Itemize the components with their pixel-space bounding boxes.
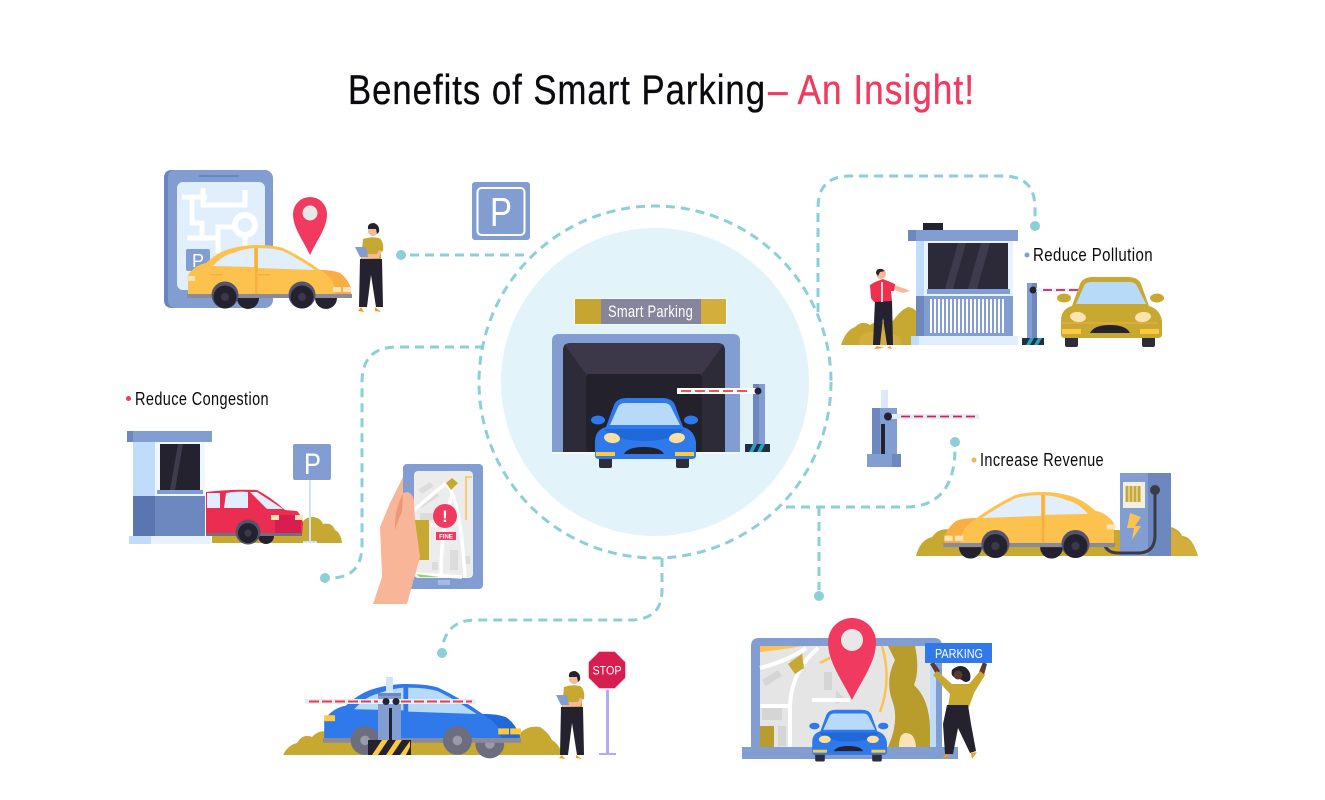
barrier xyxy=(1022,283,1107,345)
central light circle xyxy=(501,228,809,536)
connector: bottom to blue car xyxy=(437,558,662,658)
phone: FINE xyxy=(439,534,453,540)
banner: smart parking: Smart Parking xyxy=(608,302,693,321)
label: increase revenue: Increase Revenue xyxy=(980,449,1104,470)
bush xyxy=(916,527,1198,556)
illustration: standalone barrier xyxy=(867,390,979,467)
phone: ! xyxy=(442,507,448,526)
illustration: reduce pollution booth and car xyxy=(841,223,1164,349)
icon: red map pin xyxy=(293,197,327,255)
phone with route map: P xyxy=(192,251,204,271)
charging station xyxy=(1100,473,1171,556)
banner: smart parking xyxy=(574,298,727,325)
laptop xyxy=(742,638,958,759)
red map pin xyxy=(828,618,876,700)
blue front car xyxy=(591,398,698,468)
person holding parking sign xyxy=(930,662,987,759)
yellow side car xyxy=(187,245,352,309)
person in red shirt xyxy=(870,269,910,349)
connector: right to increase revenue xyxy=(786,437,960,507)
stop sign: STOP xyxy=(592,666,622,678)
blue front car xyxy=(809,710,888,762)
bush highlight xyxy=(1171,530,1198,556)
bush xyxy=(841,307,918,345)
title: – An Insight! xyxy=(768,66,975,113)
bush xyxy=(212,517,342,543)
phone xyxy=(403,464,483,589)
booth xyxy=(127,431,212,544)
icon: parking sign: P xyxy=(490,189,512,235)
parking sign xyxy=(925,643,992,663)
title: Benefits of Smart Parking xyxy=(348,66,766,113)
hand xyxy=(373,477,420,604)
garage xyxy=(552,334,740,454)
barrier xyxy=(677,384,770,452)
illustration: electric charging car xyxy=(916,473,1198,559)
dashed ring xyxy=(479,206,831,558)
blue side car xyxy=(323,684,521,758)
parking sign post xyxy=(293,444,331,543)
red car xyxy=(206,490,303,544)
illustration: central smart parking gate xyxy=(552,298,770,468)
illustration: booth with red car xyxy=(127,431,342,544)
connector: top-left sign link xyxy=(396,250,528,260)
booth xyxy=(908,223,1018,345)
person with tablet, top left xyxy=(355,223,383,312)
illustration: hand holding phone with fine alert xyxy=(373,464,483,604)
label: reduce pollution: Reduce Pollution xyxy=(1033,244,1153,265)
parking sign: PARKING xyxy=(935,646,983,661)
illustration: laptop map with pin, car and person xyxy=(742,618,992,762)
person with tablet xyxy=(556,671,584,759)
connector: left to reduce congestion xyxy=(320,347,484,583)
connector: bottom right to laptop xyxy=(814,507,824,601)
illustration: blue car with barrier and stop sign xyxy=(283,651,626,759)
gold front car xyxy=(1057,277,1164,347)
barrier xyxy=(305,677,475,755)
bushes xyxy=(283,727,562,755)
stop sign xyxy=(588,651,626,755)
yellow side car facing left xyxy=(943,492,1115,559)
parking sign post: P xyxy=(304,448,321,481)
connector: top-right to reduce pollution xyxy=(818,176,1040,312)
label: reduce congestion: Reduce Congestion xyxy=(135,388,269,409)
phone with route map xyxy=(164,170,273,308)
icon: parking sign xyxy=(472,182,530,240)
